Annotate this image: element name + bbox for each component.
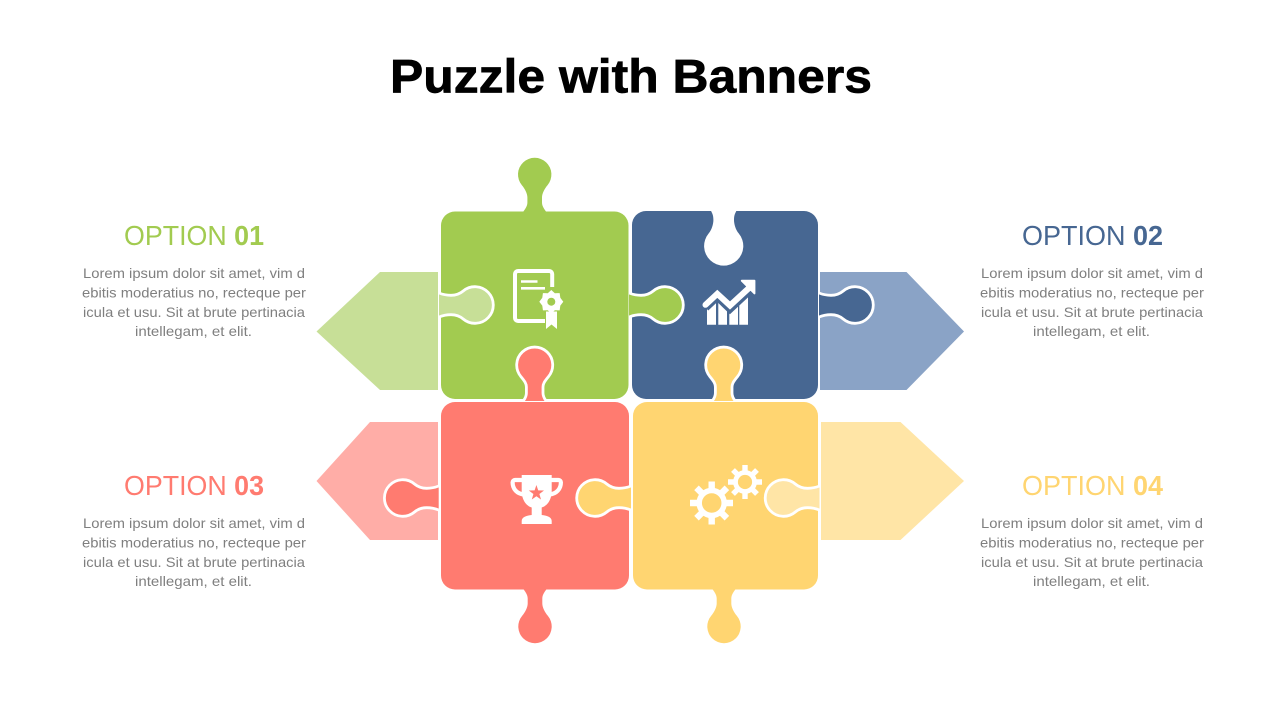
heading: option 04: OPTION 04 [1022,470,1164,501]
body: option 04: icula et usu. Sit at brute pertinacia [981,555,1203,570]
body: option 02: icula et usu. Sit at brute pertinacia [981,305,1203,320]
icon: certificate [515,271,564,329]
body: option 03 [82,516,306,589]
body: option 02: ebitis moderatius no, recteque per [980,286,1204,300]
body: option 01: Lorem ipsum dolor sit amet, vim d [83,266,305,281]
heading: option 02: OPTION 02 [1022,220,1163,251]
body: option 02 [980,266,1204,339]
body: option 01: icula et usu. Sit at brute pertinacia [83,305,305,320]
puzzle piece: blue [632,210,873,399]
puzzle piece: yellow [577,347,820,643]
body: option 03: intellegam, et elit. [135,574,252,589]
body: option 01: ebitis moderatius no, recteque per [82,286,306,300]
text block: option 01 [82,220,306,339]
banner: option 04 arrow [821,422,964,540]
text block: option 02 [980,220,1204,339]
text block: option 04 [980,470,1204,589]
title: Puzzle with Banners [390,50,872,104]
heading: option 03: OPTION 03 [124,470,264,501]
banner: option 03 arrow [316,422,438,540]
body: option 02: Lorem ipsum dolor sit amet, vim d [981,266,1203,281]
heading: option 01: OPTION 01 [124,220,264,251]
puzzle piece: red [384,347,629,643]
banner: option 02 arrow [820,272,964,390]
body: option 01: intellegam, et elit. [135,324,252,339]
body: option 04: ebitis moderatius no, recteque per [980,536,1204,550]
icon: trophy [513,475,561,524]
body: option 04 [980,516,1204,589]
body: option 01 [82,266,306,339]
body: option 03: Lorem ipsum dolor sit amet, vim d [83,516,305,531]
icon: gears [690,465,762,524]
body: option 04: Lorem ipsum dolor sit amet, vim d [981,516,1203,531]
icon: growth chart [705,281,754,325]
puzzle piece: green [439,158,683,399]
body: option 04: intellegam, et elit. [1033,574,1150,589]
banner: option 01 arrow [316,272,438,390]
body: option 02: intellegam, et elit. [1033,324,1150,339]
body: option 03: icula et usu. Sit at brute pertinacia [83,555,305,570]
text block: option 03 [82,470,306,589]
body: option 03: ebitis moderatius no, recteque per [82,536,306,550]
